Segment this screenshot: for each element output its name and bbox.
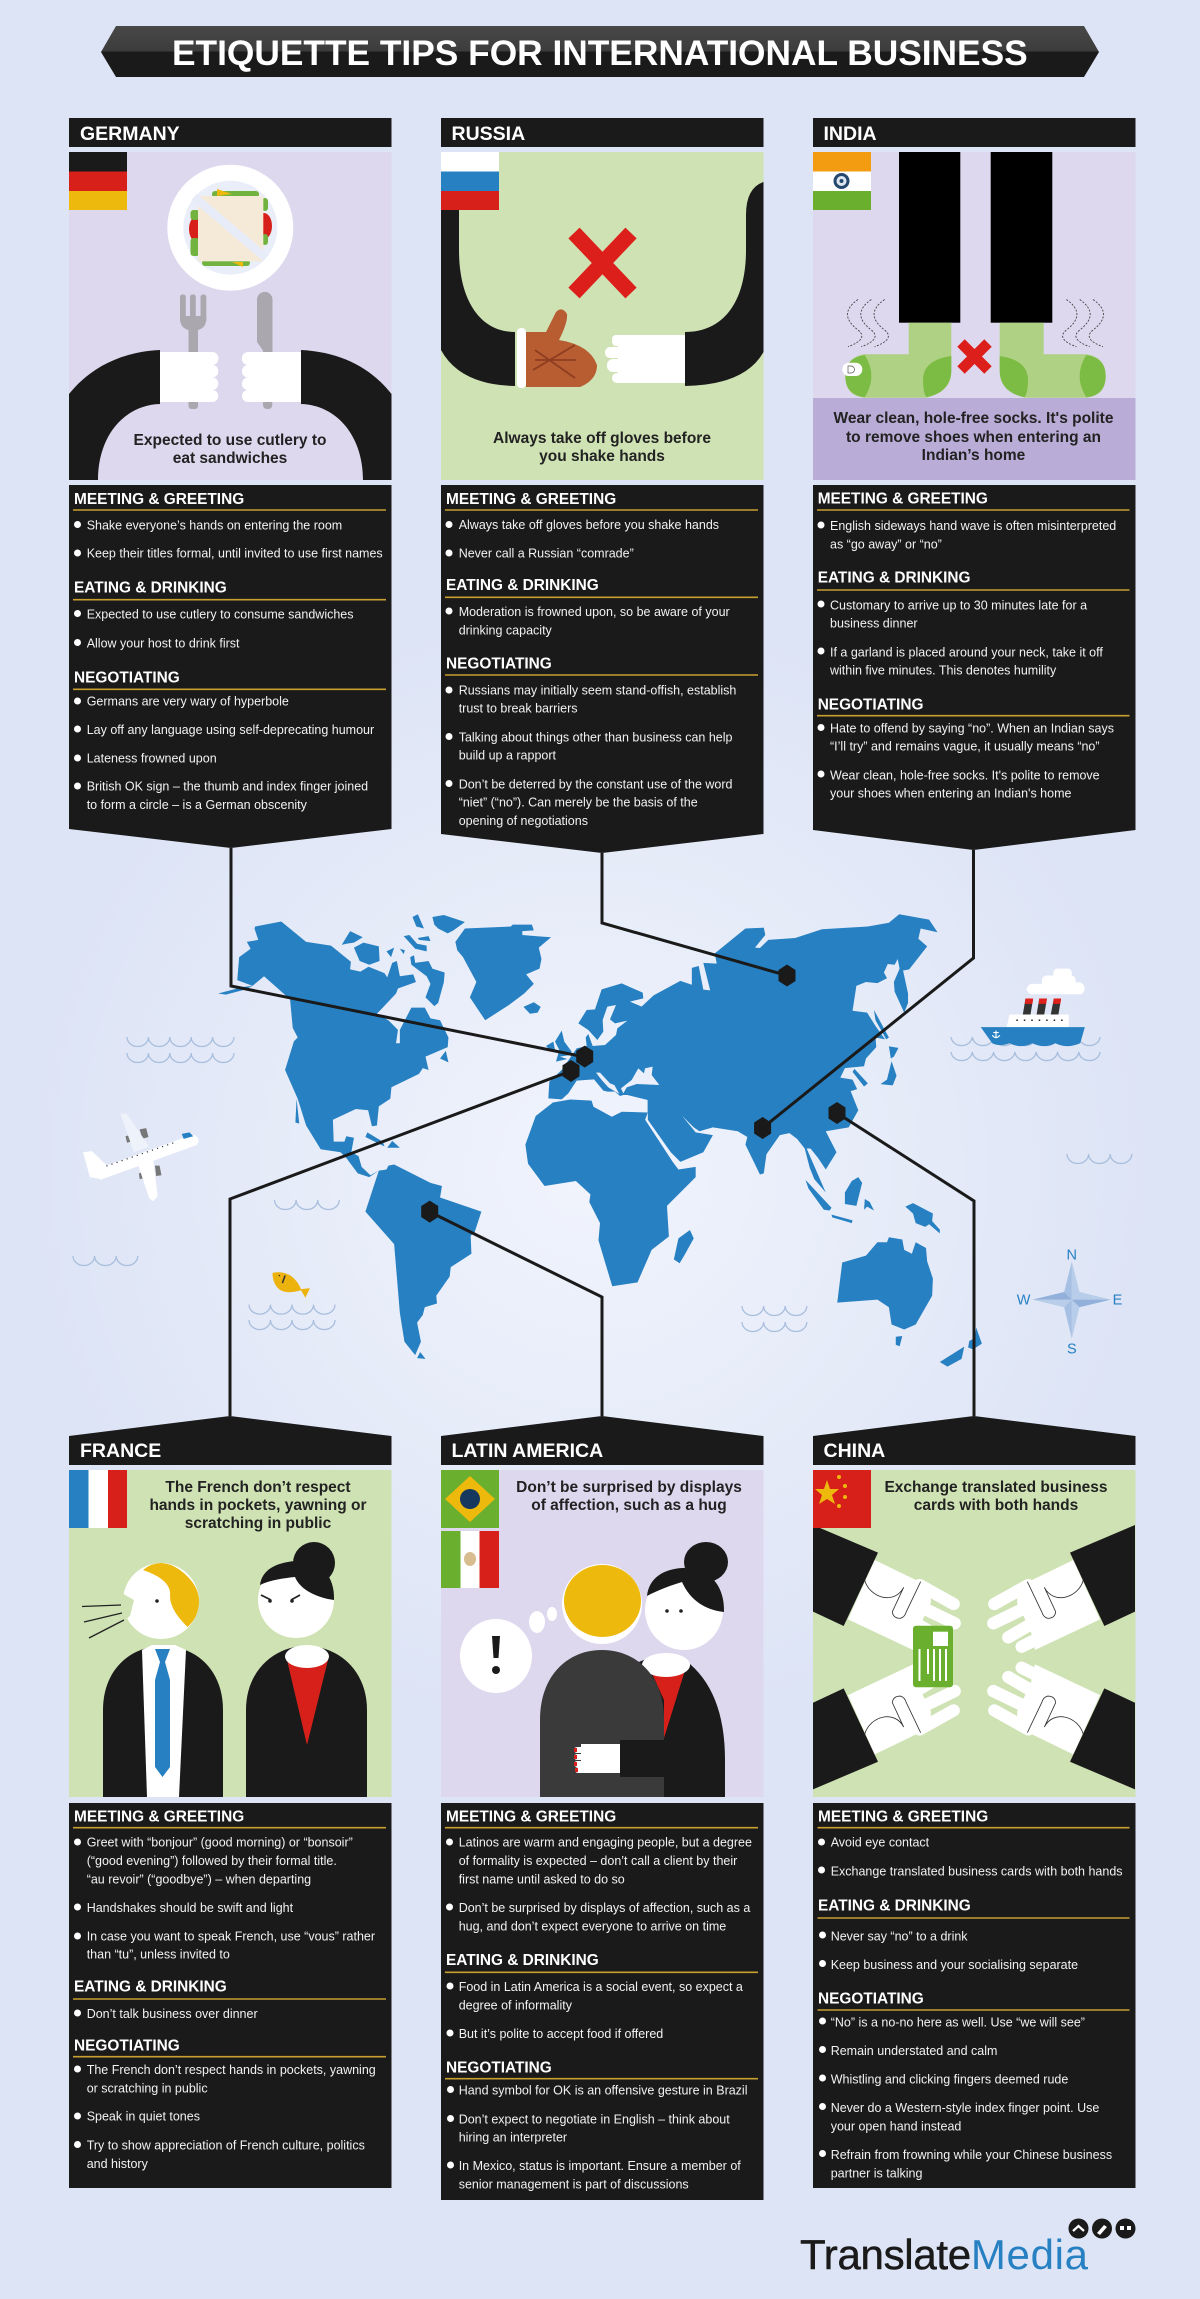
flag: china (813, 1470, 871, 1528)
red cross (574, 233, 631, 293)
tips: france: The French don’t respect hands in pockets, yawning (87, 2063, 376, 2077)
illustration: cutlery and sandwich (69, 152, 392, 480)
country header: RUSSIA (452, 123, 525, 145)
europe (548, 983, 680, 1123)
top right hand (993, 1525, 1135, 1650)
illustration: business card exchange (813, 1470, 1136, 1797)
caption: Indian’s home (922, 447, 1026, 464)
flag: brazil (441, 1470, 499, 1528)
illustration: socks (813, 152, 1136, 480)
tips: india: EATING & DRINKING (818, 570, 970, 587)
country header: GERMANY (80, 123, 180, 145)
tips: latin america: degree of informality (459, 1998, 573, 2012)
location markers (421, 964, 846, 1223)
logo: TranslateMedia (800, 2218, 1136, 2278)
caption (834, 410, 1114, 464)
tips: russia: Always take off gloves before you shake hands (459, 518, 719, 532)
logo symbols (1068, 2218, 1136, 2238)
tips: india: your shoes when entering an Indian's home (830, 787, 1071, 801)
icon: ship (981, 969, 1085, 1046)
title text: ETIQUETTE TIPS FOR INTERNATIONAL BUSINESS (172, 34, 1028, 73)
caption: Wear clean, hole-free socks. It's polite (834, 410, 1114, 427)
cutlery (180, 292, 272, 409)
tips: latin america: first name until asked to do so (459, 1872, 625, 1886)
connector lines (230, 848, 974, 1416)
tips: latin america: Don’t expect to negotiate in English – think about (459, 2112, 730, 2126)
icon: fish (272, 1272, 310, 1298)
tips: latin america: hug, and don’t expect everyone to arrive on time (459, 1919, 726, 1933)
logo: TranslateMedia: TranslateMedia (800, 2231, 1089, 2278)
country header (69, 1416, 392, 1465)
tips: russia: drinking capacity (459, 623, 553, 637)
waves (73, 1037, 1132, 1332)
tips: france: Handshakes should be swift and light (87, 1901, 294, 1915)
tips: russia: Russians may initially seem stand-offish, establish (459, 684, 736, 698)
tips: russia: Moderation is frowned upon, so be aware of your (459, 605, 730, 619)
tips: france: NEGOTIATING (74, 2037, 180, 2054)
tips: india: business dinner (830, 616, 918, 630)
tips: russia: trust to break barriers (459, 702, 577, 716)
tips: latin america (441, 1803, 764, 2200)
caption: cards with both hands (914, 1497, 1078, 1514)
tips: china: Exchange translated business cards with both hands (831, 1865, 1123, 1879)
tips: germany: Lateness frowned upon (87, 752, 217, 766)
tips: china: Avoid eye contact (831, 1836, 930, 1850)
tips: china: Refrain from frowning while your Chinese business (831, 2148, 1112, 2162)
tips: france: Speak in quiet tones (87, 2110, 200, 2124)
tips: russia: EATING & DRINKING (446, 577, 599, 594)
plate with sandwich (167, 165, 293, 291)
tips: germany: MEETING & GREETING (74, 491, 244, 508)
compass letters: W (1017, 1293, 1031, 1309)
tips: latin america: senior management is part of discussions (459, 2177, 689, 2191)
tips: russia: opening of negotiations (459, 814, 588, 828)
adriatic and black sea (596, 1073, 619, 1094)
tips: latin america: Hand symbol for OK is an offensive gesture in Brazil (459, 2083, 747, 2097)
tips: germany: Keep their titles formal, until invited to use first names (87, 547, 383, 561)
tips: france: EATING & DRINKING (74, 1979, 227, 1996)
tips: germany: Allow your host to drink first (87, 636, 240, 650)
tips: latin america: But it’s polite to accept food if offered (459, 2027, 663, 2041)
tips: india: Customary to arrive up to 30 minutes late for a (830, 598, 1087, 612)
tips: latin america: hiring an interpreter (459, 2131, 567, 2145)
compass letters (1017, 1248, 1123, 1358)
tips: latin america: In Mexico, status is important. Ensure a member of (459, 2159, 741, 2173)
british isles (555, 1031, 572, 1062)
caption: to remove shoes when entering an (846, 429, 1101, 446)
tips: latin america: Food in Latin America is a social event, so expect a (459, 1980, 743, 1994)
tips: russia: “niet” (“no”). Can merely be the basis of the (459, 796, 698, 810)
country header (441, 118, 764, 147)
tips: china: NEGOTIATING (818, 1990, 924, 2007)
flag: india (813, 152, 871, 210)
woman (246, 1542, 367, 1797)
tips: latin america: Don’t be surprised by displays of affection, such as a (459, 1901, 750, 1915)
tips: germany: Germans are very wary of hyperbole (87, 695, 289, 709)
tips: latin america: of formality is expected – don’t call a client by their (459, 1854, 737, 1868)
flag: mexico (441, 1531, 499, 1588)
tips: china: Keep business and your socialising separate (831, 1958, 1078, 1972)
country header: INDIA (824, 123, 877, 145)
tips: france: or scratching in public (87, 2081, 208, 2095)
tips: china: Never do a Western-style index finger point. Use (831, 2101, 1099, 2115)
tips: india: English sideways hand wave is often misinterpreted (830, 519, 1116, 533)
tips: germany: Lay off any language using self-deprecating humour (87, 723, 374, 737)
tips: china: your open hand instead (831, 2119, 961, 2133)
tips: france: Greet with “bonjour” (good morning) or “bonsoir” (87, 1836, 353, 1850)
person hugged (540, 1564, 664, 1797)
arms (69, 350, 160, 480)
tips: latin america: NEGOTIATING (446, 2059, 552, 2076)
red cross (961, 343, 988, 370)
tips: latin america: Latinos are warm and engaging people, but a degree (459, 1836, 752, 1850)
tips: germany: EATING & DRINKING (74, 580, 227, 597)
country header (441, 1416, 764, 1465)
smell lines (848, 300, 1104, 347)
caption: you shake hands (539, 448, 665, 465)
caption (149, 1479, 367, 1532)
compass letters: N (1067, 1248, 1077, 1264)
tips: germany (69, 485, 392, 848)
panel: latin america (441, 1416, 764, 2200)
tips: india: Hate to offend by saying “no”. When an Indian says (830, 721, 1114, 735)
caption: Expected to use cutlery to (134, 432, 326, 449)
illustration: man and woman (69, 1470, 392, 1797)
right sock (1000, 323, 1106, 398)
panel: russia (441, 118, 764, 853)
panel: france (69, 1416, 392, 2188)
tips: india (813, 485, 1136, 850)
tips: france: In case you want to speak French, use “vous” rather (87, 1930, 375, 1944)
tips: india: as “go away” or “no” (830, 537, 942, 551)
legs (899, 152, 1052, 323)
country header (813, 118, 1136, 147)
caption: hands in pockets, yawning or (149, 1497, 367, 1514)
tips: russia: Don’t be deterred by the constant use of the word (459, 777, 733, 791)
tips: india: MEETING & GREETING (818, 490, 988, 507)
tips: russia (441, 485, 764, 853)
gloved hand (526, 309, 597, 387)
illustration: gloves and handshake (441, 152, 764, 480)
tips: russia: MEETING & GREETING (446, 491, 616, 508)
tips: china: partner is talking (831, 2166, 922, 2180)
bottom left hand (813, 1664, 955, 1789)
arctic islands, greenland, south america (218, 986, 253, 995)
tips: germany: Expected to use cutlery to consume sandwiches (87, 607, 354, 621)
caption: eat sandwiches (173, 450, 287, 467)
asia (641, 914, 937, 1192)
icon: airplane (83, 1113, 198, 1201)
tips: germany: to form a circle – is a German obscenity (87, 798, 308, 812)
tips: germany: British OK sign – the thumb and index finger joined (87, 780, 368, 794)
man (82, 1563, 223, 1797)
tips: china: Whistling and clicking fingers deemed rude (831, 2072, 1068, 2086)
tips: france: (“good evening”) followed by their formal title. (87, 1854, 337, 1868)
tips: france (69, 1803, 392, 2188)
tips: russia: NEGOTIATING (446, 655, 552, 672)
tips: india: within five minutes. This denotes humility (829, 664, 1057, 678)
panel: china (813, 1416, 1136, 2188)
tips: france: Don’t talk business over dinner (87, 2007, 258, 2021)
tips: russia: Never call a Russian “comrade” (459, 547, 634, 561)
tips: latin america: EATING & DRINKING (446, 1952, 599, 1969)
tips: china: Remain understated and calm (831, 2044, 997, 2058)
tips: india: If a garland is placed around your neck, take it off (830, 645, 1103, 659)
caption (516, 1479, 742, 1514)
caption: Always take off gloves before (493, 430, 711, 447)
tips: france: “au revoir” (“goodbye”) – when departing (87, 1872, 311, 1886)
tips: germany: Shake everyone’s hands on entering the room (87, 518, 342, 532)
tips: china: Never say “no” to a drink (831, 1930, 968, 1944)
caption: The French don’t respect (165, 1479, 351, 1496)
tips: russia: Talking about things other than business can help (459, 730, 733, 744)
tips: china: EATING & DRINKING (818, 1898, 971, 1915)
thought bubble (460, 1607, 557, 1693)
flag: germany (69, 152, 127, 210)
world map (218, 914, 982, 1367)
caption (493, 430, 711, 465)
country header: CHINA (824, 1440, 885, 1462)
top left hand (813, 1525, 955, 1650)
tips: france: MEETING & GREETING (74, 1809, 244, 1826)
caption: Don’t be surprised by displays (516, 1479, 742, 1496)
tips: china: “No” is a no-no here as well. Use “we will see” (831, 2016, 1085, 2030)
tips: india: “I’ll try” and remains vague, it usually means “no” (830, 740, 1100, 754)
flag: france (69, 1470, 127, 1528)
caption: scratching in public (185, 1515, 332, 1532)
hugging arm (574, 1740, 664, 1777)
tips: france: Try to show appreciation of French culture, politics (87, 2138, 365, 2152)
tips: india: Wear clean, hole-free socks. It's polite to remove (830, 768, 1100, 782)
panel: germany (69, 118, 392, 848)
business card (913, 1626, 953, 1687)
africa, australia, islands (525, 1099, 696, 1286)
icon: compass (1017, 1248, 1123, 1358)
north america (237, 922, 448, 1177)
tips: russia: build up a rapport (459, 748, 557, 762)
panel: india (813, 118, 1136, 850)
tips: germany: NEGOTIATING (74, 670, 180, 687)
tips: france: and history (87, 2157, 149, 2171)
country header: LATIN AMERICA (452, 1440, 603, 1462)
compass letters: E (1113, 1293, 1123, 1309)
country header: FRANCE (80, 1440, 161, 1462)
tips: india: NEGOTIATING (818, 696, 923, 713)
tips: china: MEETING & GREETING (818, 1809, 988, 1826)
tips: france: than “tu”, unless invited to (87, 1948, 230, 1962)
flag: russia (441, 152, 499, 210)
caption (134, 432, 326, 467)
compass letters: S (1067, 1342, 1077, 1358)
tips: china (813, 1803, 1136, 2188)
hugging woman (633, 1542, 728, 1797)
caption: Exchange translated business (884, 1479, 1108, 1496)
bare hand (605, 335, 685, 383)
country header (69, 118, 392, 147)
country header (813, 1416, 1136, 1465)
bottom right hand (993, 1664, 1135, 1789)
title banner (101, 26, 1099, 77)
left sock (842, 323, 951, 398)
tips: latin america: MEETING & GREETING (446, 1809, 616, 1826)
illustration: hug (441, 1470, 764, 1797)
caption (884, 1479, 1108, 1514)
caption: of affection, such as a hug (531, 1497, 727, 1514)
